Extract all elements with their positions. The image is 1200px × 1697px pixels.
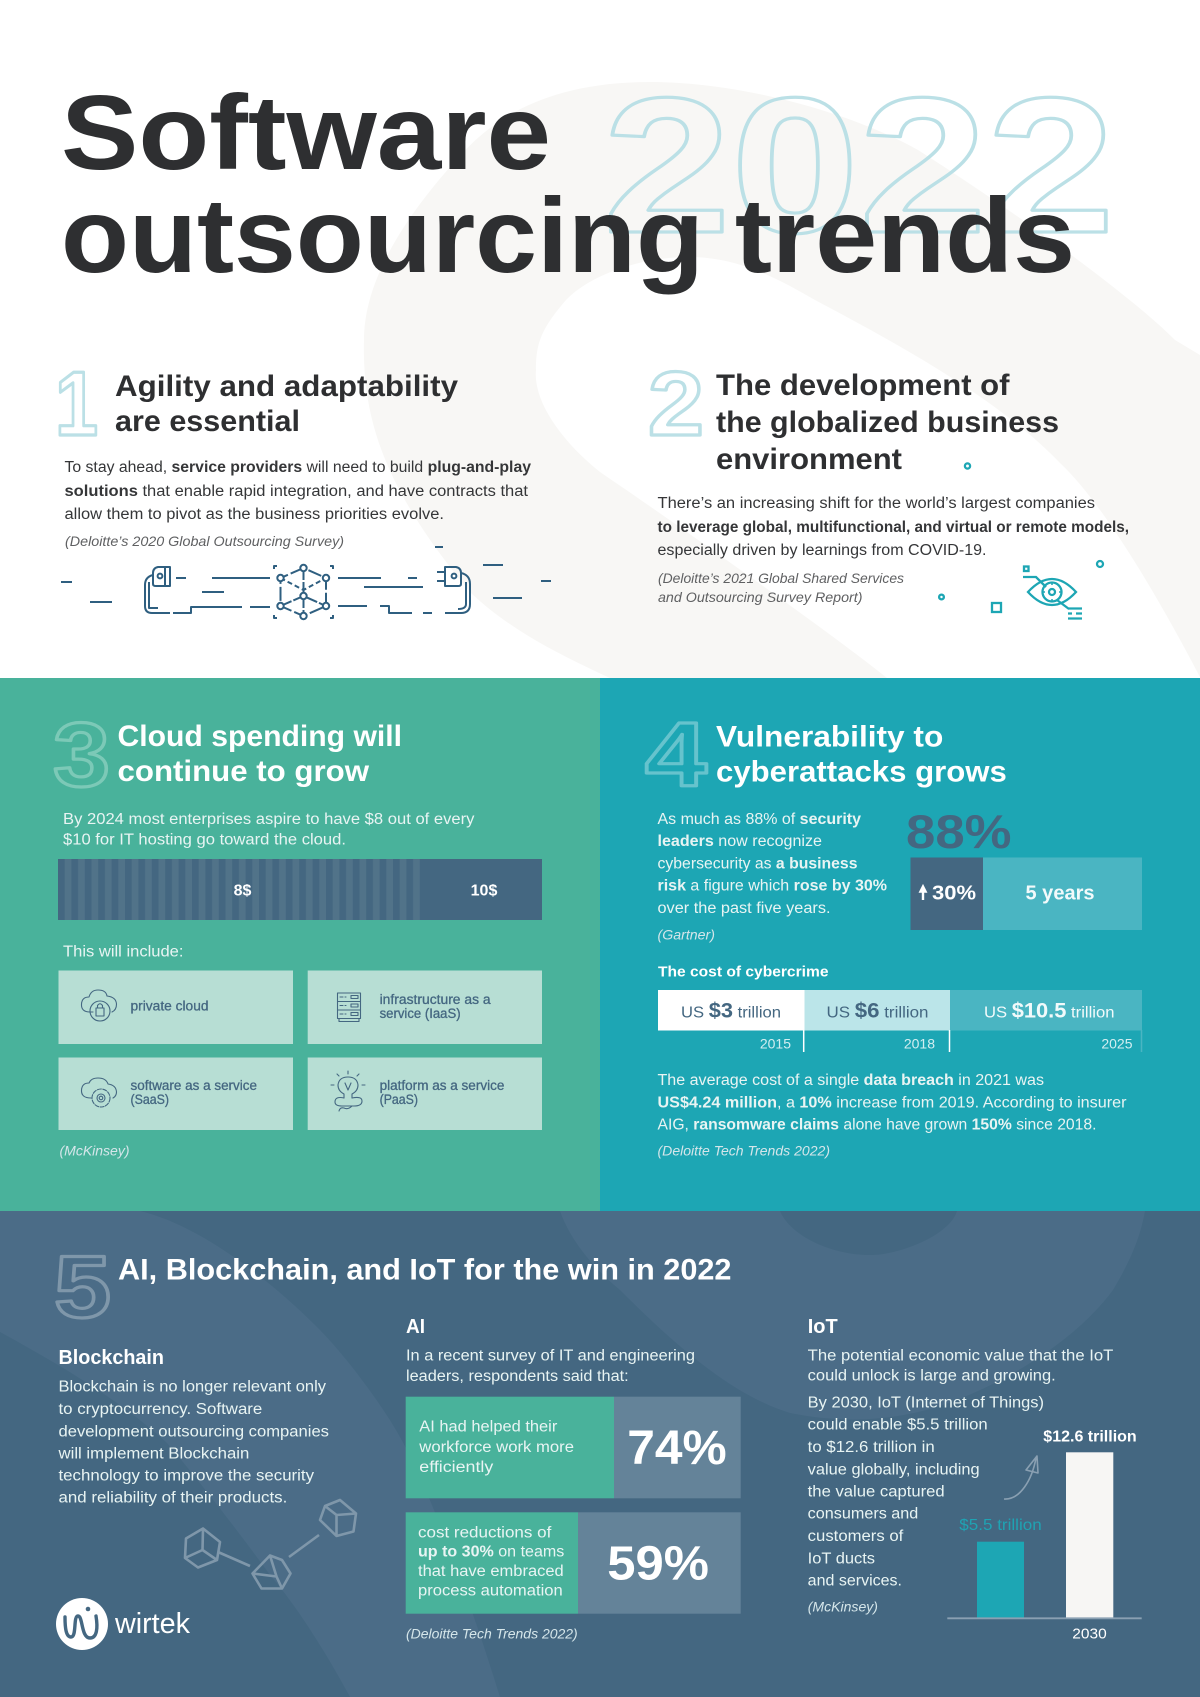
stat: 88 percent: 88% — [906, 805, 1012, 858]
card: infrastructure as a service: infrastructure as a — [380, 992, 491, 1007]
logo: wirtek — [56, 1598, 190, 1650]
body text 4: As much as 88% of security — [658, 811, 861, 828]
stat card: 74 percent — [406, 1397, 741, 1498]
source 2: (Deloitte’s 2021 Global Shared Services — [658, 570, 904, 586]
year outline 2022: 2022 — [603, 57, 1115, 273]
AI intro text: leaders, respondents said that: — [406, 1368, 629, 1385]
heading 5: AI, Blockchain, and IoT for the win in 2022 — [118, 1254, 732, 1286]
source IoT: (McKinsey) — [808, 1598, 878, 1614]
timeline bar: cost of cybercrime — [658, 990, 1142, 1052]
blockchain body text: development outsourcing companies — [58, 1424, 329, 1440]
numeral 3: 3 — [53, 705, 110, 806]
body text 4: risk a figure which rose by 30% — [658, 878, 887, 894]
IoT body text: could enable $5.5 trillion — [808, 1416, 988, 1434]
timeline bar: cost of cybercrime: US $3 trillion — [681, 1000, 781, 1022]
blockchain body text: and reliability of their products. — [58, 1490, 287, 1506]
source 3: (McKinsey) — [60, 1142, 130, 1158]
stat card: 59 percent — [406, 1512, 741, 1614]
column: IoT: IoT — [808, 1316, 838, 1338]
body text 4b: US$4.24 million , a 10% increase from 2019. According to insurer — [658, 1094, 1126, 1112]
card: platform as a service — [308, 1058, 542, 1130]
heading 2 — [716, 369, 1059, 476]
body text 4b: AIG, ransomware claims alone have grown 150% since 2018. — [658, 1116, 1096, 1134]
numeral 4: 4 — [645, 705, 707, 806]
source 4b: (Deloitte Tech Trends 2022) — [658, 1142, 830, 1158]
body text 2: There’s an increasing shift for the world’s largest companies — [658, 495, 1095, 512]
this will include label: This will include: — [63, 944, 184, 960]
stat box: 30 percent over 5 years: 5 years — [1026, 882, 1094, 904]
icon: light bulb — [331, 1071, 365, 1111]
blockchain body text: technology to improve the security — [58, 1468, 314, 1484]
icon: cloud with lock — [81, 990, 116, 1021]
bar: 8 of 10 dollars: 10$ — [471, 882, 497, 900]
heading 3: continue to grow — [118, 755, 370, 788]
IoT body text: IoT ducts — [808, 1550, 875, 1568]
heading 1: Agility and adaptability — [115, 370, 458, 403]
card: infrastructure as a service — [308, 970, 542, 1044]
card: software as a service: (SaaS) — [130, 1092, 169, 1107]
column: blockchain: Blockchain — [58, 1347, 164, 1369]
icon: linked cubes — [185, 1500, 356, 1588]
heading 1 — [115, 370, 458, 438]
heading 2: The development of — [716, 369, 1011, 402]
body text 4: over the past five years. — [658, 900, 830, 917]
heading 4: Vulnerability to — [716, 720, 943, 754]
stat card: 74 percent: efficiently — [419, 1459, 494, 1476]
timeline bar: cost of cybercrime: 2015 — [760, 1036, 791, 1052]
stat box: 30 percent over 5 years — [910, 858, 1142, 930]
card: platform as a service: (PaaS) — [380, 1092, 418, 1107]
IoT body text: consumers and — [808, 1506, 918, 1522]
column: AI — [406, 1316, 741, 1642]
bar chart: IoT value: 2030 — [1072, 1626, 1107, 1642]
blockchain body text — [57, 1378, 329, 1506]
heading 4 — [716, 720, 1007, 788]
IoT body text — [808, 1348, 1114, 1590]
title — [61, 74, 1075, 295]
source 2 — [658, 570, 904, 605]
background swoosh — [364, 82, 1200, 678]
body text 1: To stay ahead, service providers will need to build plug-and-play — [64, 459, 531, 476]
IoT body text: customers of — [808, 1528, 904, 1545]
timeline bar: cost of cybercrime: US $10.5 trillion — [984, 1000, 1114, 1022]
stat card: 74 percent: AI had helped their — [419, 1418, 557, 1436]
panel: trend 3 cloud spending — [0, 678, 600, 1211]
stat card: 59 percent: that have embraced — [418, 1563, 564, 1580]
heading 2: environment — [716, 443, 902, 476]
stat card: 74 percent: workforce work more — [418, 1439, 574, 1456]
card: platform as a service: platform as a service — [380, 1078, 504, 1093]
blockchain body text: Blockchain is no longer relevant only — [58, 1378, 326, 1396]
bar chart: IoT value: $5.5 trillion — [959, 1517, 1042, 1534]
body text 4 — [658, 811, 887, 917]
timeline bar: cost of cybercrime: 2018 — [904, 1036, 935, 1052]
body text 2 — [658, 495, 1129, 559]
body text 4b — [658, 1072, 1126, 1134]
body text 2: especially driven by learnings from COVID-19. — [658, 542, 986, 559]
card: software as a service: software as a service — [130, 1078, 257, 1093]
subheading: cost of cybercrime: The cost of cybercrime — [658, 964, 828, 980]
title: outsourcing trends — [61, 177, 1075, 295]
stat card: 59 percent: 59% — [607, 1538, 709, 1590]
timeline bar: cost of cybercrime: 2025 — [1101, 1036, 1133, 1052]
logo: wirtek: wirtek — [114, 1608, 190, 1640]
source 4a: (Gartner) — [658, 926, 715, 942]
card: private cloud — [58, 970, 293, 1044]
AI intro text: In a recent survey of IT and engineering — [406, 1348, 695, 1364]
timeline bar: cost of cybercrime: US $6 trillion — [826, 1000, 928, 1022]
blockchain body text: to cryptocurrency. Software — [58, 1401, 262, 1418]
panel: trend 1 — [55, 354, 551, 619]
heading 3: Cloud spending will — [118, 720, 402, 753]
heading 3 — [118, 720, 402, 788]
card: software as a service — [58, 1058, 293, 1130]
column: IoT — [808, 1316, 1142, 1642]
body text 1: solutions that enable rapid integration, and have contracts that — [64, 483, 529, 500]
arrow up — [920, 886, 926, 900]
body text 4: cybersecurity as a business — [658, 856, 858, 872]
numeral 2: 2 — [648, 354, 704, 455]
intro text 3 — [63, 811, 475, 848]
column: blockchain — [57, 1347, 356, 1588]
IoT body text: The potential economic value that the IoT — [808, 1348, 1114, 1364]
IoT body text: the value captured — [808, 1484, 945, 1500]
source AI: (Deloitte Tech Trends 2022) — [406, 1626, 578, 1642]
body text 4b: The average cost of a single data breach in 2021 was — [658, 1072, 1044, 1089]
icon: cloud with gear — [81, 1078, 116, 1107]
bar chart: IoT value: $12.6 trillion — [1043, 1428, 1137, 1446]
bar: 8 of 10 dollars — [58, 859, 542, 920]
IoT body text: value globally, including — [808, 1462, 980, 1478]
title: Software — [61, 74, 551, 192]
body text 4: leaders now recognize — [658, 833, 822, 850]
blockchain body text: will implement Blockchain — [57, 1446, 249, 1462]
AI intro text — [406, 1348, 695, 1385]
stat card: 59 percent: up to 30% on teams — [418, 1544, 565, 1560]
numeral 1: 1 — [55, 354, 98, 455]
icon: eye with circuit — [939, 463, 1103, 618]
body text 2: to leverage global, multifunctional, and virtual or remote models, — [658, 519, 1129, 536]
panel: trend 5 AI blockchain IoT — [0, 1211, 1200, 1697]
source 1: (Deloitte’s 2020 Global Outsourcing Survey) — [65, 533, 344, 549]
source 2: and Outsourcing Survey Report) — [658, 589, 862, 605]
IoT body text: could unlock is large and growing. — [808, 1368, 1056, 1384]
card: private cloud: private cloud — [130, 998, 208, 1014]
arrow: growth — [1004, 1456, 1038, 1499]
icon: plug and cube circuit — [61, 547, 551, 619]
heading 1: are essential — [115, 405, 300, 438]
intro text 3: $10 for IT hosting go toward the cloud. — [63, 832, 346, 848]
body text 1: allow them to pivot as the business priorities evolve. — [64, 506, 444, 523]
body text 1 — [64, 459, 531, 523]
IoT body text: and services. — [808, 1572, 902, 1590]
bar chart: IoT value — [947, 1428, 1142, 1642]
numeral 5: 5 — [54, 1237, 111, 1336]
stat card: 59 percent: process automation — [418, 1582, 563, 1600]
card: infrastructure as a service: service (IaaS) — [380, 1006, 461, 1021]
panel: trend 2 — [648, 354, 1129, 618]
panel: trend 4 vulnerability — [600, 678, 1200, 1211]
stat card: 59 percent: cost reductions of — [418, 1524, 552, 1542]
bar: 8 of 10 dollars: 8$ — [234, 882, 252, 900]
column: AI: AI — [406, 1316, 425, 1338]
stat card: 74 percent: 74% — [627, 1422, 727, 1475]
heading 4: cyberattacks grows — [716, 756, 1007, 788]
IoT body text: to $12.6 trillion in — [808, 1439, 935, 1456]
stat box: 30 percent over 5 years: 30% — [932, 882, 976, 904]
icon: server rack — [338, 993, 360, 1022]
IoT body text: By 2030, IoT (Internet of Things) — [808, 1394, 1044, 1412]
heading 2: the globalized business — [716, 406, 1059, 439]
intro text 3: By 2024 most enterprises aspire to have $8 out of every — [63, 811, 475, 828]
